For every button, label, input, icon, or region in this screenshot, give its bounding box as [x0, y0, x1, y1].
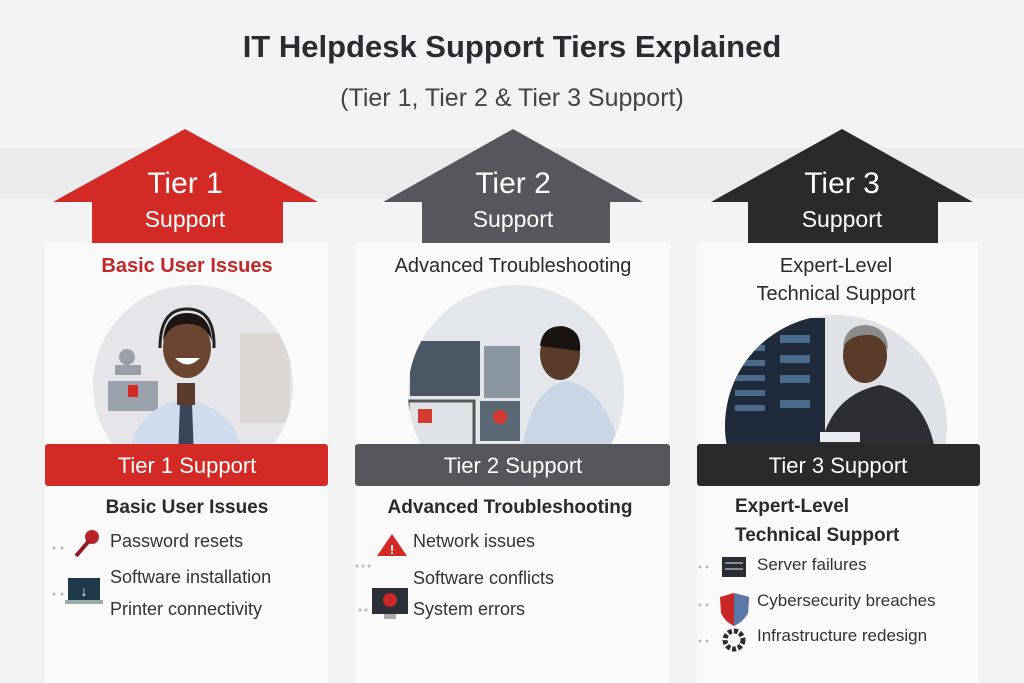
panel: tier 3: Technical Support — [735, 525, 900, 546]
panel: tier 2 — [355, 257, 670, 619]
panel: tier 3: Technical Support — [757, 283, 916, 305]
band: tier 3 support: Tier 3 Support — [769, 453, 907, 478]
list: tier 1 items: Software installation — [110, 567, 271, 587]
heading: advanced troubleshooting: Advanced Troubleshooting — [395, 255, 631, 277]
subheading: Advanced Troubleshooting — [388, 497, 632, 518]
arrow: tier 1 — [53, 129, 318, 243]
photo: tier 2 agent — [408, 285, 624, 444]
photo: tier 3 engineer — [725, 315, 947, 444]
band: tier 2 support: Tier 2 Support — [444, 453, 582, 478]
icon: server — [722, 557, 746, 577]
icon: shield — [720, 593, 749, 626]
list: tier 2 items: Software conflicts — [413, 568, 554, 588]
arrow: tier 2 — [383, 129, 643, 243]
list: tier 2 items: Network issues — [413, 531, 535, 551]
list: tier 3 items: Infrastructure redesign — [757, 626, 927, 645]
band: tier 1 support — [45, 444, 328, 486]
title: IT Helpdesk Support Tiers Explained — [243, 29, 781, 64]
subheading: Expert-Level — [735, 496, 849, 517]
photo: tier 1 agent — [93, 285, 293, 444]
arrow: tier 1: Support — [145, 206, 226, 232]
icon: monitor error — [372, 588, 408, 619]
arrow: tier 3: Support — [802, 206, 883, 232]
list: tier 2 items — [356, 531, 554, 619]
list: tier 1 items: Printer connectivity — [110, 599, 262, 619]
panel: tier 1 — [45, 257, 328, 619]
list: tier 3 items: Server failures — [757, 555, 867, 574]
icon: warning: ! — [390, 542, 394, 557]
band: tier 3 support — [697, 444, 980, 486]
panel: tier 3 — [697, 257, 980, 652]
icon: key — [76, 530, 99, 556]
band: tier 2 support — [355, 444, 670, 486]
icon: laptop download — [65, 578, 103, 604]
icon: gear — [725, 631, 743, 649]
icon: laptop download: ↓ — [80, 583, 88, 599]
heading: expert-level technical support: Expert-Level — [780, 255, 892, 277]
list: tier 3 items — [698, 555, 936, 649]
subheading: Basic User Issues — [106, 497, 268, 518]
icon: warning — [377, 534, 407, 557]
arrow: tier 2: Tier 2 — [475, 167, 551, 200]
list: tier 3 items: Cybersecurity breaches — [757, 591, 936, 610]
arrow: tier 2: Support — [473, 206, 554, 232]
arrow: tier 1: Tier 1 — [147, 167, 223, 200]
band: tier 1 support: Tier 1 Support — [118, 453, 256, 478]
list: tier 2 items: System errors — [413, 599, 525, 619]
list: tier 1 items — [52, 530, 271, 619]
heading: basic user issues: Basic User Issues — [101, 255, 273, 277]
arrow: tier 3 — [711, 129, 973, 243]
subtitle: (Tier 1, Tier 2 & Tier 3 Support) — [340, 84, 684, 112]
arrow: tier 3: Tier 3 — [804, 167, 880, 200]
list: tier 1 items: Password resets — [110, 531, 243, 551]
